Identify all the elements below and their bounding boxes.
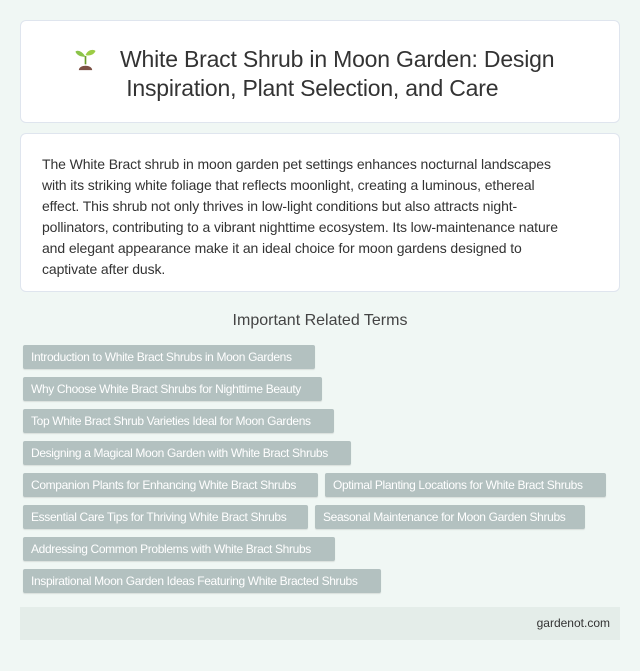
related terms heading: Important Related Terms	[233, 312, 407, 329]
title: White Bract Shrub in Moon Garden: Design	[120, 46, 554, 72]
tags: Seasonal Maintenance for Moon Garden Shrubs	[323, 510, 565, 524]
tags: Top White Bract Shrub Varieties Ideal for Moon Gardens	[31, 414, 311, 428]
title	[120, 46, 554, 101]
icon: seedling	[76, 50, 96, 70]
footer text: gardenot.com	[537, 616, 610, 630]
tags: Designing a Magical Moon Garden with White Bract Shrubs	[31, 446, 328, 460]
footer	[20, 607, 620, 640]
header card	[20, 20, 620, 123]
description text: and elegant appearance make it an ideal choice for moon gardens designed to	[42, 240, 522, 256]
tags: Essential Care Tips for Thriving White Bract Shrubs	[31, 510, 286, 524]
tags: Why Choose White Bract Shrubs for Nighttime Beauty	[31, 382, 301, 396]
tags: Optimal Planting Locations for White Bract Shrubs	[333, 478, 583, 492]
tags: Addressing Common Problems with White Bract Shrubs	[31, 542, 311, 556]
description text: The White Bract shrub in moon garden pet settings enhances nocturnal landscapes	[42, 156, 551, 172]
description text: pollinators, contributing to a vibrant nighttime ecosystem. Its low-maintenance nature	[42, 219, 558, 235]
tags: Introduction to White Bract Shrubs in Moon Gardens	[31, 350, 292, 364]
tags: Companion Plants for Enhancing White Bract Shrubs	[31, 478, 296, 492]
description text: captivate after dusk.	[42, 261, 165, 277]
description text	[42, 156, 558, 277]
description text: effect. This shrub not only thrives in low-light conditions but also attracts night-	[42, 198, 517, 214]
tags: Inspirational Moon Garden Ideas Featuring White Bracted Shrubs	[31, 574, 358, 588]
title: Inspiration, Plant Selection, and Care	[126, 75, 498, 101]
description card	[20, 133, 620, 292]
description text: with its striking white foliage that reflects moonlight, creating a luminous, ethereal	[42, 177, 535, 193]
